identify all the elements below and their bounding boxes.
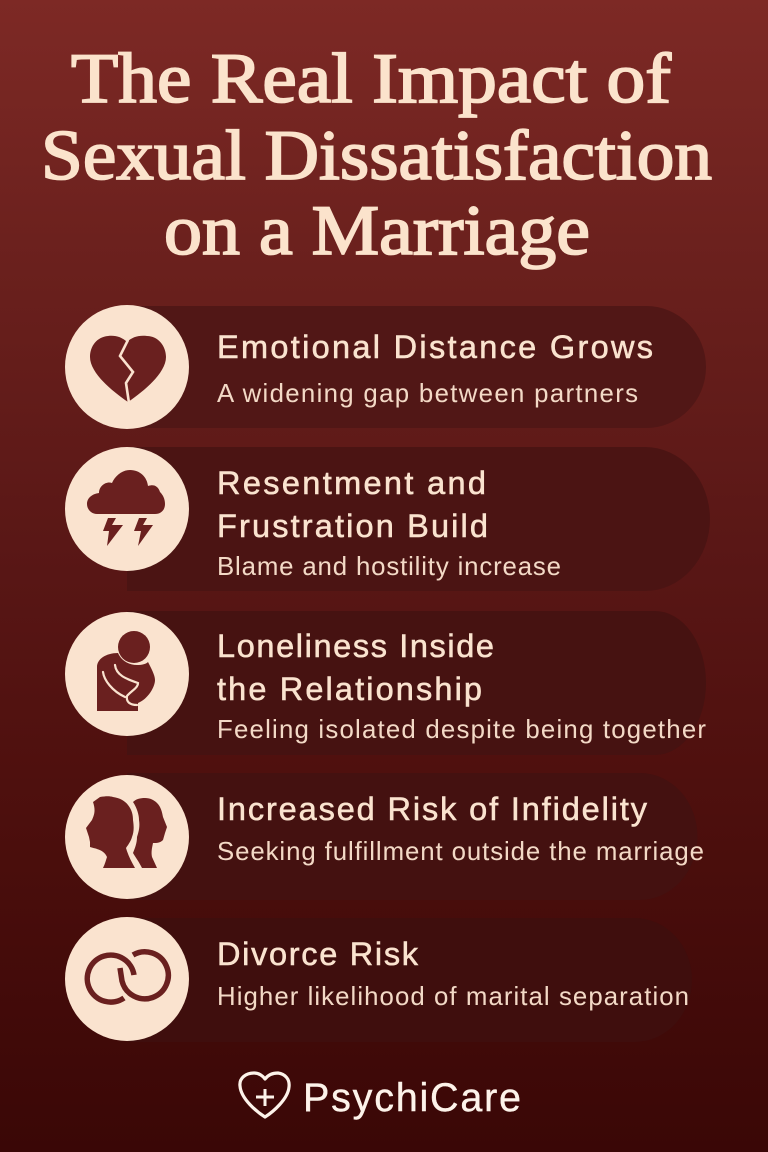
panel: loneliness: the Relationship: [217, 671, 482, 707]
title: The Real Impact of: [71, 40, 671, 118]
panel background: [127, 611, 706, 755]
icon: heart with plus: [240, 1073, 289, 1117]
panel: divorce: [65, 917, 692, 1042]
panel background: [127, 773, 697, 900]
heading: Loneliness Inside: [217, 628, 494, 664]
panel: loneliness: [65, 611, 706, 755]
panel: emotional distance: [65, 305, 706, 429]
description: Blame and hostility increase: [217, 553, 561, 581]
panel background: [127, 306, 706, 428]
icon: broken heart: [65, 305, 189, 429]
icon: person hugging self: [65, 612, 189, 736]
panel background: [127, 918, 692, 1042]
panel: infidelity: [65, 773, 704, 900]
icon: separating rings: [65, 917, 189, 1041]
title: [41, 40, 712, 270]
panel: resentment: Frustration Build: [217, 508, 488, 544]
logo: [240, 1073, 521, 1120]
heading: Increased Risk of Infidelity: [217, 791, 648, 827]
panel background: [127, 447, 710, 591]
heading: Emotional Distance Grows: [217, 329, 653, 365]
heading: Resentment and: [217, 465, 486, 501]
icon: storm cloud: [65, 447, 189, 571]
panel: resentment: [65, 447, 710, 591]
title: on a Marriage: [164, 192, 590, 270]
heading: Divorce Risk: [217, 936, 419, 972]
description: Feeling isolated despite being together: [217, 716, 706, 744]
title: Sexual Dissatisfaction: [41, 117, 712, 195]
brand name: PsychiCare: [303, 1076, 521, 1120]
description: Seeking fulfillment outside the marriage: [217, 838, 704, 866]
description: A widening gap between partners: [217, 380, 638, 408]
description: Higher likelihood of marital separation: [217, 983, 689, 1011]
icon: two head profiles: [65, 775, 189, 899]
